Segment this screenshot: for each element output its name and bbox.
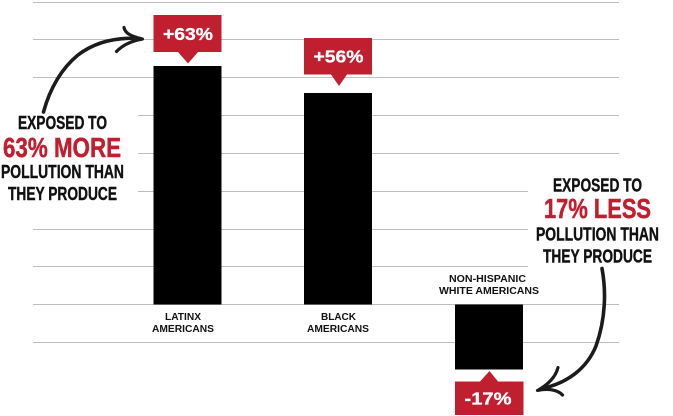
value callout: -17%: -17%	[464, 388, 512, 408]
annotation: exposed to 63% more: THEY PRODUCE	[8, 184, 117, 204]
value callout: +56%	[304, 38, 372, 86]
category label: Latinx Americans	[152, 311, 214, 335]
annotation: exposed to 17% less	[536, 176, 659, 266]
value callout: +63%: +63%	[163, 24, 213, 44]
annotation: exposed to 63% more	[1, 113, 124, 204]
bar: Non-Hispanic White Americans	[455, 304, 523, 370]
category label: Black Americans: AMERICANS	[307, 323, 369, 335]
category label: Black Americans: BLACK	[321, 311, 356, 323]
annotation: exposed to 63% more: EXPOSED TO	[18, 113, 107, 133]
annotation: exposed to 63% more: POLLUTION THAN	[1, 162, 124, 182]
category label: Non-Hispanic White Americans: NON-HISPANIC	[449, 273, 526, 285]
bar: Black Americans	[304, 93, 372, 304]
category label: Non-Hispanic White Americans: WHITE AMERICANS	[439, 285, 539, 297]
value callout: +63%	[154, 15, 222, 64]
arrow: annotation to +63% callout	[44, 28, 142, 112]
annotation: exposed to 17% less: EXPOSED TO	[553, 176, 642, 196]
value callout: +56%: +56%	[314, 46, 364, 66]
category label: Latinx Americans: AMERICANS	[152, 323, 214, 335]
value callout: -17%	[455, 371, 524, 415]
arrow: annotation to -17% callout	[538, 268, 604, 395]
category label: Latinx Americans: LATINX	[165, 311, 201, 323]
annotation: exposed to 63% more: 63% MORE	[3, 132, 121, 163]
category label: Non-Hispanic White Americans	[439, 273, 539, 297]
bar: Latinx Americans	[154, 66, 222, 304]
category label: Black Americans	[307, 311, 369, 335]
